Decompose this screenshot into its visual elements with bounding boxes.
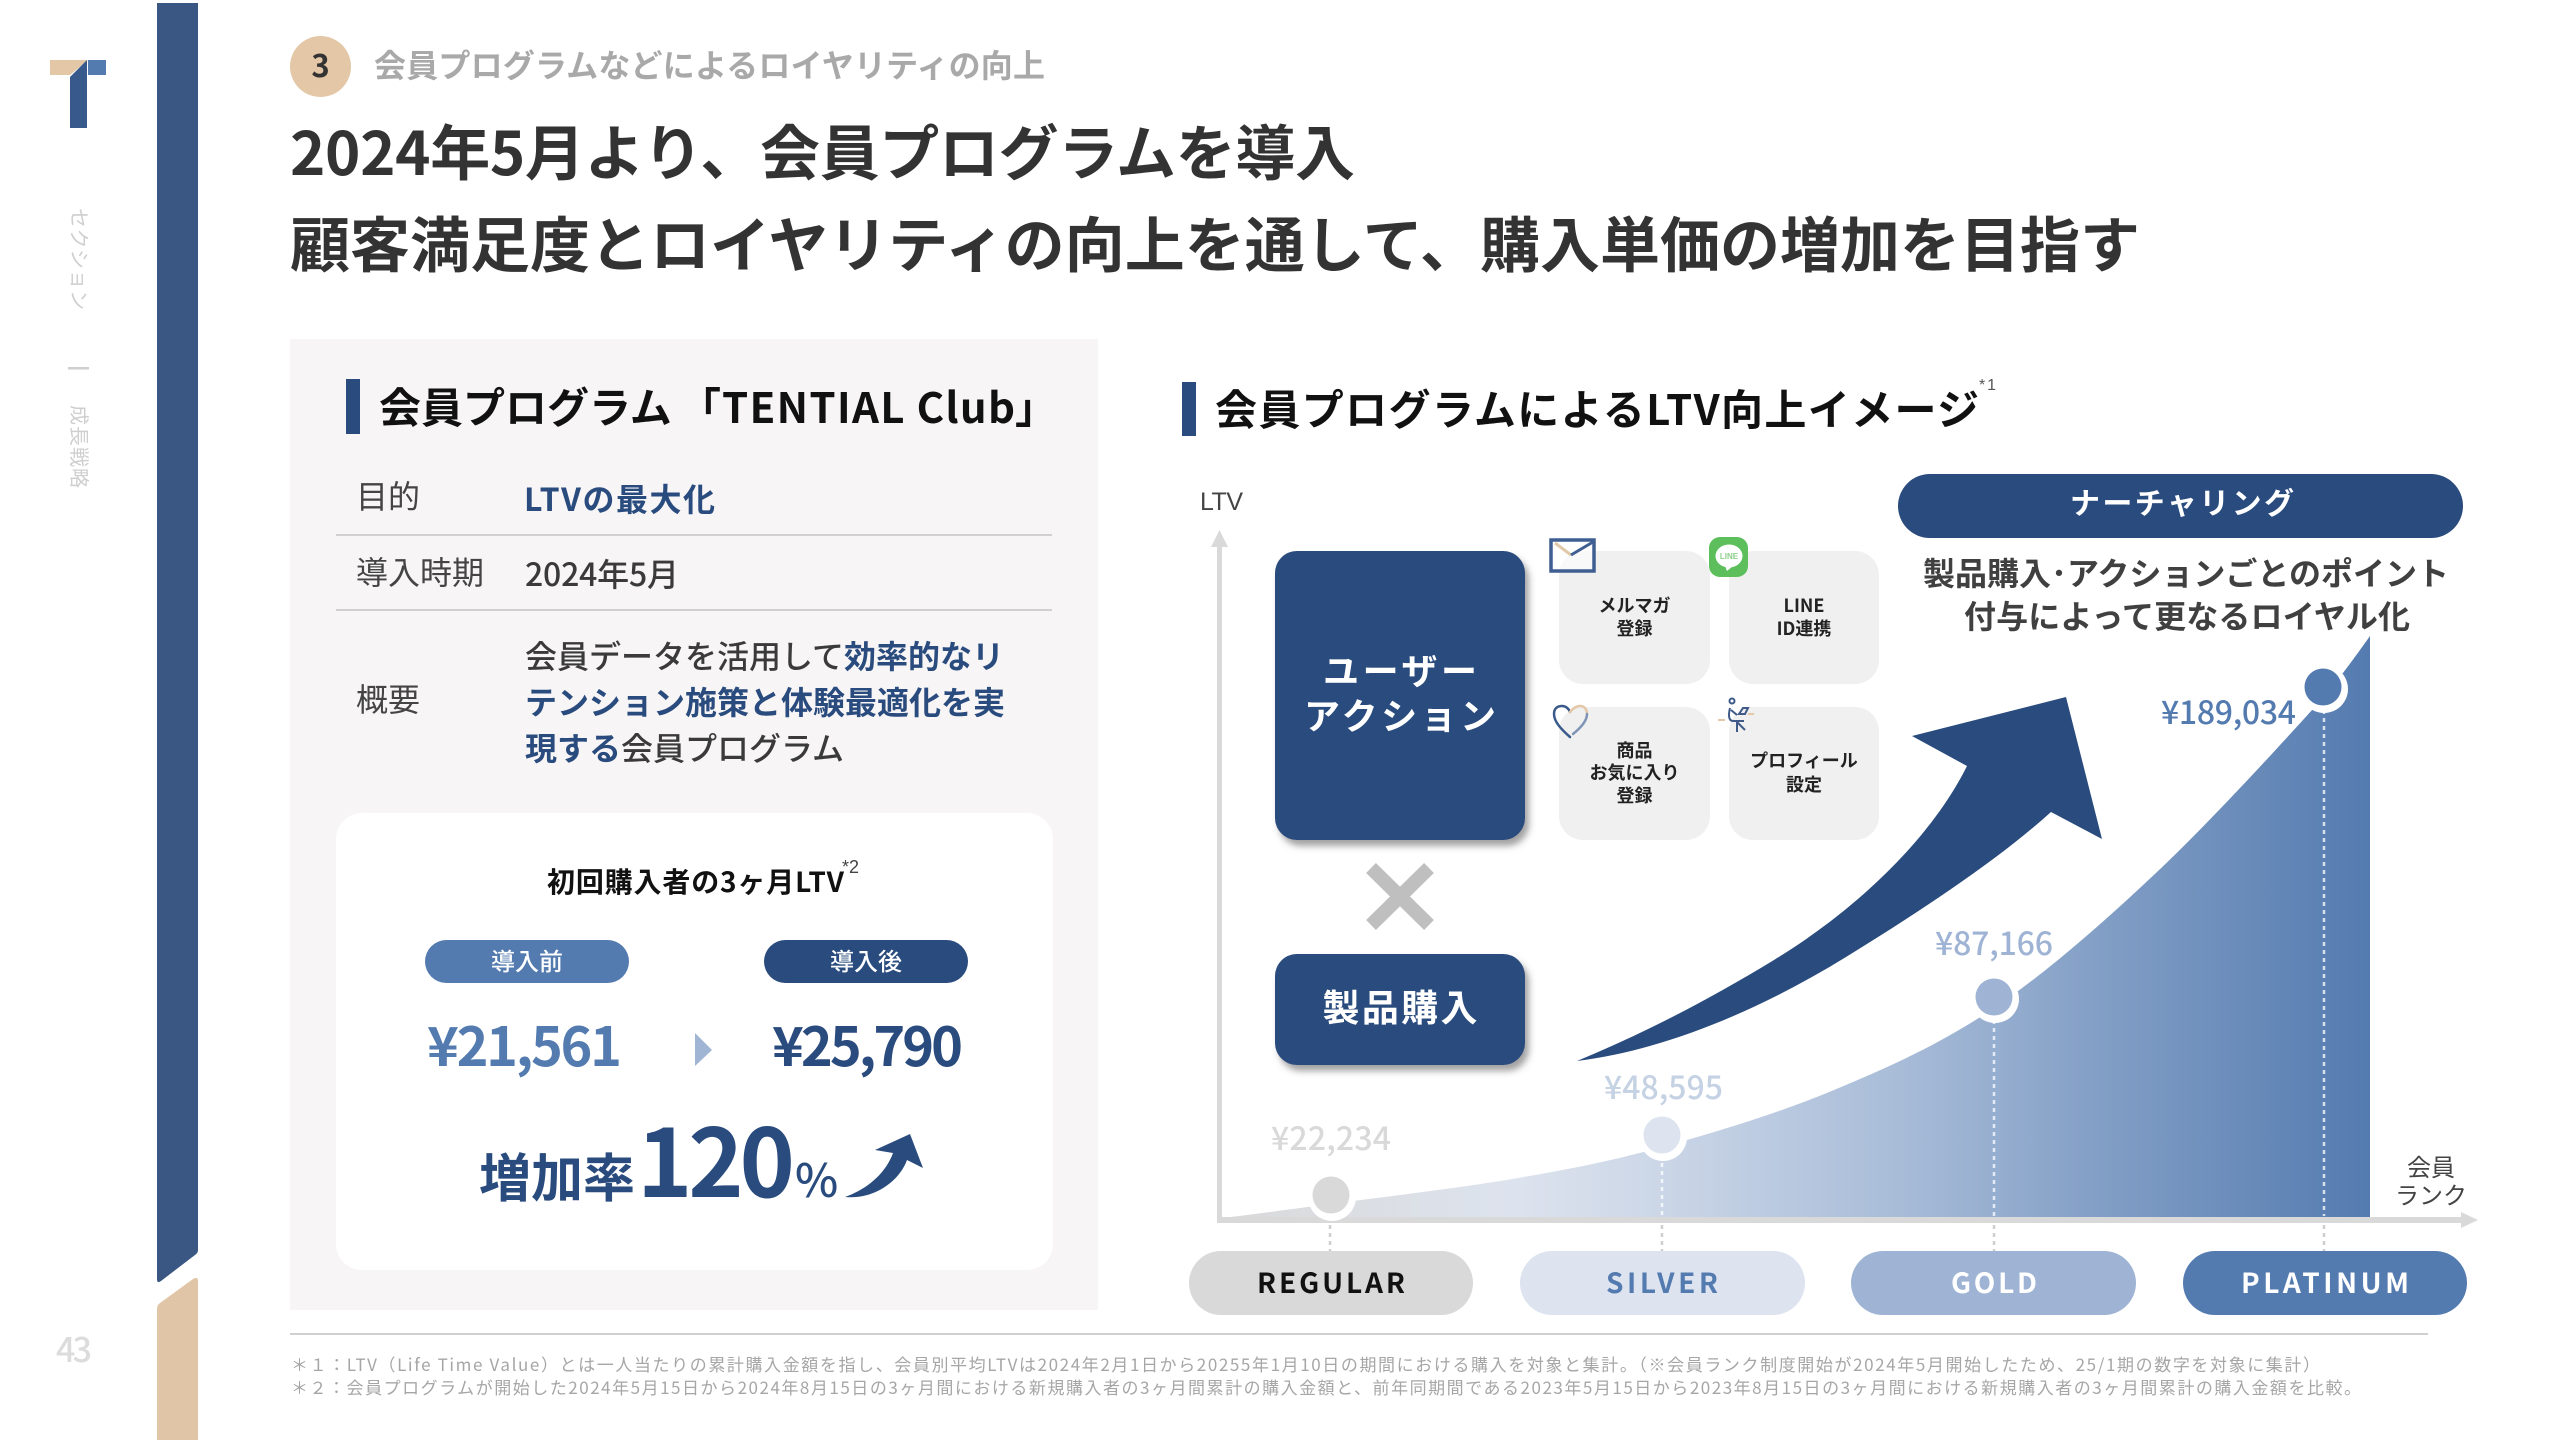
footnotes [291, 1351, 2361, 1399]
pill: gold [1851, 1251, 2136, 1315]
sidebar section label: セクション [66, 208, 95, 310]
nurturing pill [1898, 474, 2463, 538]
x axis [1217, 1212, 2478, 1228]
title: 2024年5月より、会員プログラムを導入 [290, 106, 1355, 193]
drop lines [1330, 710, 2324, 1251]
chart: LTV growth by member rank [1189, 474, 2478, 1315]
panel heading: TENTIAL Club [722, 375, 1015, 436]
row: start date [356, 548, 679, 596]
pill: regular: REGULAR [1257, 1262, 1405, 1302]
pill: silver: SILVER [1606, 1262, 1718, 1302]
card: profile [1729, 707, 1879, 840]
nurturing description [1923, 549, 2449, 638]
section heading: LTV image: *1 [1979, 377, 1996, 394]
axis label: member rank: ランク [2395, 1176, 2467, 1211]
card: LINE: ID連携 [1777, 615, 1831, 641]
row: start date: 2024年5月 [525, 550, 679, 596]
sidebar section label: 成長戦略 [66, 405, 95, 488]
increase rate: 増加率 [479, 1137, 635, 1212]
axis label: member rank [2395, 1148, 2467, 1211]
point: regular: ¥22,234 [1271, 1114, 1391, 1160]
card: mail magazine [1559, 551, 1710, 684]
card: mail magazine: メルマガ [1598, 592, 1670, 618]
section number badge [290, 36, 351, 97]
panel heading: 「 [679, 375, 721, 436]
row: summary: 会員データを活用して効率的なリ [525, 632, 1004, 678]
section number badge: 3 [311, 41, 330, 86]
point: silver: ¥48,595 [1604, 1063, 1723, 1109]
increase rate [479, 1089, 838, 1225]
arrow: before to after [695, 1033, 712, 1066]
row: purpose: 目的 [356, 472, 420, 518]
point: regular [1271, 1114, 1391, 1221]
y axis [1211, 530, 1228, 1220]
pill: after: 導入後 [830, 942, 902, 977]
panel: TENTIAL Club [290, 339, 1098, 1310]
footnotes: ＊２：会員プログラムが開始した2024年5月15日から2024年8月15日の3ヶ月間における新規購入者の3ヶ月間累計の購入金額と、前年同期間である2023年5月15日から2023年8月15日の3ヶ月間における新規購入者の3ヶ月間累計の購入金額を比較。 [291, 1374, 2361, 1399]
increase rate: % [795, 1145, 838, 1211]
pill: silver [1520, 1251, 1805, 1315]
card: favorites: 登録 [1616, 782, 1652, 808]
axis label: member rank: 会員 [2407, 1148, 2455, 1183]
card title: 初回購入者の3ヶ月LTV [547, 861, 845, 901]
pill: after [764, 940, 968, 983]
sidebar section label [66, 208, 95, 488]
row: purpose [356, 472, 715, 521]
box: user action [1275, 551, 1525, 840]
big growth arrow [1577, 697, 2102, 1061]
box: user action: ユーザー [1323, 643, 1477, 695]
card: mail magazine: 登録 [1616, 615, 1652, 641]
row: purpose: LTVの最大化 [524, 475, 715, 521]
row: summary: 概要 [356, 675, 420, 721]
increase rate: 120 [637, 1089, 795, 1225]
pill: before [425, 940, 629, 983]
row: summary: テンション施策と体験最適化を実 [525, 678, 1005, 724]
page number: 43 [56, 1323, 92, 1372]
icon: heart [1554, 706, 1587, 737]
icon: LINE: LINE [1720, 552, 1739, 561]
row: summary: 現する会員プログラム [525, 724, 844, 770]
card: favorites [1559, 707, 1710, 840]
footnotes: ＊１：LTV（Life Time Value）とは一人当たりの累計購入金額を指し、会員別平均LTVは2024年2月1日から20255年1月10日の期間における購入を対象と集計。（※会員ランク制度開始が2024年5月開始したため、25/1期の数字を対象に集計） [291, 1351, 2320, 1376]
section subtitle: 会員プログラムなどによるロイヤリティの向上 [374, 41, 1045, 87]
card: favorites: 商品 [1616, 737, 1652, 763]
card: LINE: LINE [1784, 592, 1824, 618]
title: 顧客満足度とロイヤリティの向上を通して、購入単価の増加を目指す [290, 198, 2140, 285]
pill: regular [1189, 1251, 1473, 1315]
pill: platinum: PLATINUM [2241, 1262, 2409, 1302]
multiply mark [1371, 868, 1429, 925]
nurturing description: 付与によって更なるロイヤル化 [1964, 592, 2410, 638]
pill: before: 導入前 [491, 942, 563, 977]
section heading: LTV image: 会員プログラムによるLTV向上イメージ [1215, 377, 1979, 438]
title [290, 106, 2140, 285]
card: LTV comparison [336, 813, 1053, 1270]
box: user action: アクション [1304, 688, 1496, 740]
icon: person [1718, 698, 1754, 732]
icon: mail [1551, 540, 1594, 571]
nurturing description: 製品購入･アクションごとのポイント [1923, 549, 2449, 595]
point: silver [1604, 1063, 1723, 1161]
point: platinum: ¥189,034 [2161, 688, 2296, 734]
value: after: ¥25,790 [772, 1003, 963, 1082]
area curve [1222, 636, 2370, 1218]
icon: increase arrow [845, 1134, 923, 1197]
panel heading: 」 [1015, 375, 1057, 436]
panel heading [346, 375, 1057, 436]
card: favorites: お気に入り [1590, 759, 1680, 785]
card: profile: 設定 [1786, 771, 1822, 797]
card title: *2 [842, 857, 859, 877]
box: product purchase: 製品購入 [1322, 978, 1478, 1032]
point: gold [1935, 919, 2053, 1023]
nurturing pill: ナーチャリング [2070, 479, 2294, 523]
point: platinum [2161, 665, 2348, 734]
sidebar bar: tan [157, 1278, 198, 1440]
logo [50, 60, 106, 128]
row: summary [356, 632, 1005, 770]
value: before: ¥21,561 [427, 1003, 622, 1082]
sidebar bar: blue [157, 3, 198, 1282]
axis label: LTV: LTV [1200, 488, 1243, 516]
icon: LINE [1709, 537, 1748, 577]
card: LINE [1729, 551, 1879, 684]
row: start date: 導入時期 [356, 548, 484, 594]
point: gold: ¥87,166 [1935, 919, 2053, 965]
card: profile: プロフィール [1750, 747, 1858, 773]
pill: platinum [2183, 1251, 2467, 1315]
box: product purchase [1275, 954, 1525, 1065]
panel heading: 会員プログラム [379, 375, 672, 436]
pill: gold: GOLD [1951, 1262, 2037, 1302]
